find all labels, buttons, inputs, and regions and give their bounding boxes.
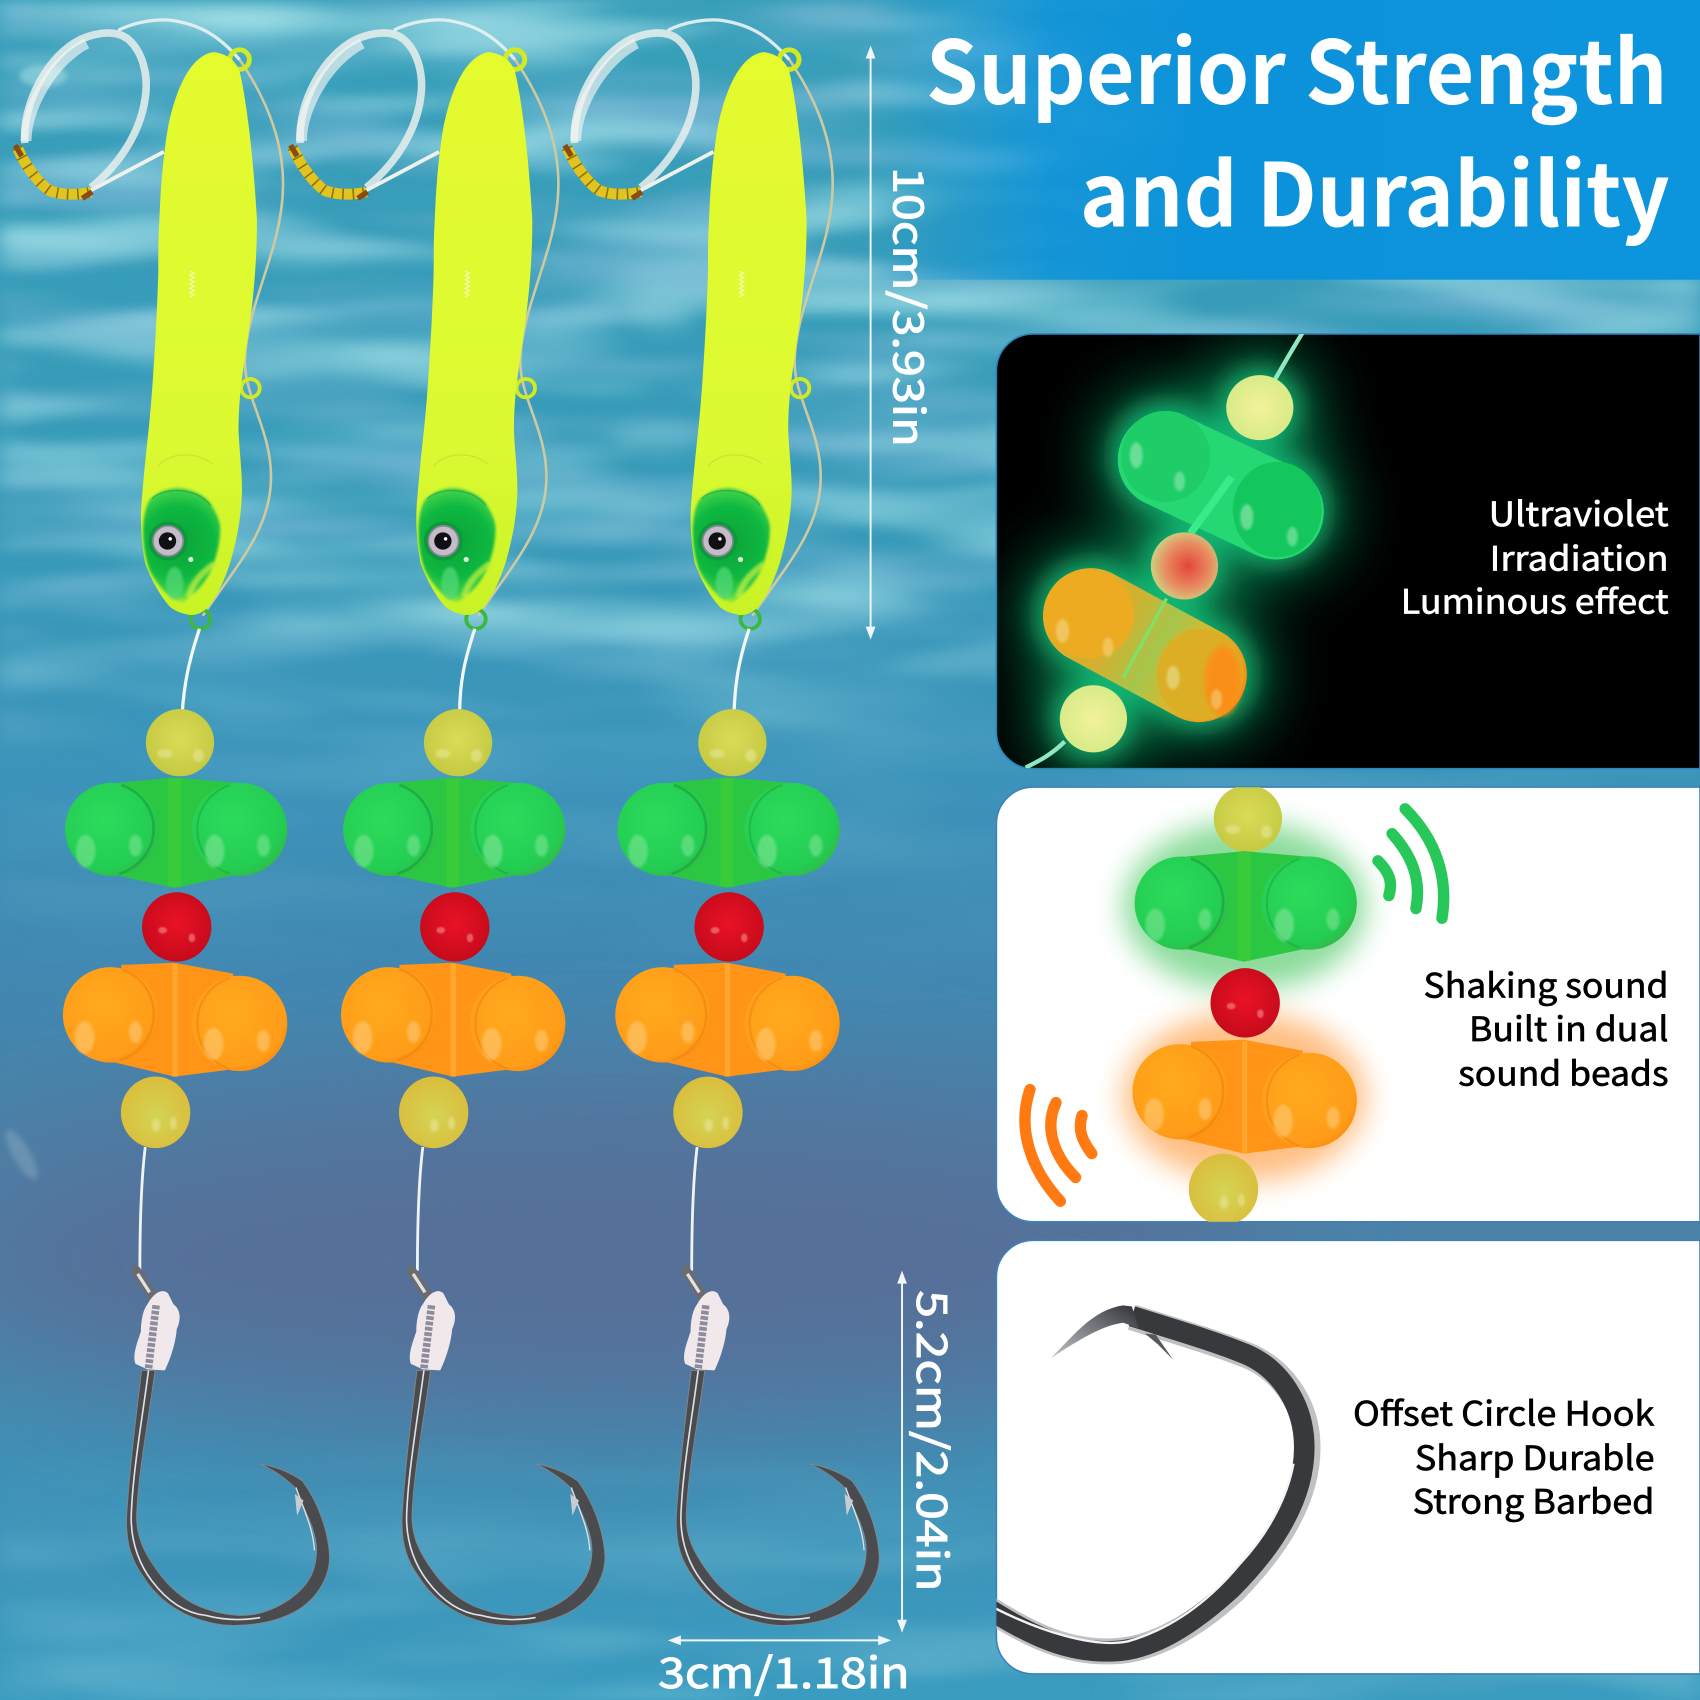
panel text: Luminous effect	[1401, 575, 1669, 624]
title banner	[867, 0, 1700, 280]
bead stack	[341, 709, 565, 1148]
rig 2	[291, 20, 605, 1625]
leader line to beads	[460, 629, 475, 713]
icon: orange sound waves	[1025, 1090, 1092, 1201]
panel text	[1424, 958, 1669, 1095]
circle hook	[127, 1271, 330, 1625]
panel text: Sharp Durable	[1415, 1431, 1654, 1480]
panel text: Built in dual	[1469, 1002, 1669, 1051]
lure with leader loop	[15, 20, 283, 629]
dimension: lure length: 10cm/3.93in	[880, 167, 941, 447]
dimension: hook length: 5.2cm/2.04in	[904, 1290, 965, 1592]
line to hook	[692, 1147, 697, 1271]
icon: green sound waves	[1378, 809, 1444, 918]
hook closeup	[989, 1305, 1308, 1651]
circle hook	[676, 1271, 879, 1625]
leader line to beads	[734, 629, 749, 713]
title text: and Durability	[1080, 126, 1670, 253]
line to hook	[140, 1147, 145, 1271]
sound bead illustration	[1123, 785, 1366, 1225]
bead stack	[63, 709, 287, 1148]
line to hook	[417, 1147, 423, 1271]
panel: circle hook	[989, 1240, 1700, 1674]
rig 1	[15, 20, 330, 1625]
panel text: Irradiation	[1490, 531, 1669, 580]
lure with leader loop	[565, 20, 833, 629]
lure with leader loop	[291, 20, 558, 629]
leader line to beads	[182, 629, 199, 713]
dimension: lure length	[866, 46, 941, 640]
title text: Superior Strength	[926, 3, 1667, 130]
circle hook	[402, 1271, 605, 1625]
dimension: hook length	[897, 1271, 965, 1633]
panel text: Shaking sound	[1424, 958, 1669, 1007]
panel: shaking sound	[996, 785, 1700, 1225]
glowing beads illustration	[1026, 332, 1322, 773]
panel: ultraviolet glow	[996, 332, 1700, 773]
panel text	[1401, 487, 1669, 624]
bead stack	[615, 709, 840, 1148]
title text	[926, 3, 1670, 253]
panel text	[1353, 1387, 1655, 1524]
panel text: Offset Circle Hook	[1353, 1387, 1655, 1436]
panel text: sound beads	[1458, 1046, 1669, 1095]
rig 3	[565, 20, 879, 1625]
dimension: hook width: 3cm/1.18in	[658, 1640, 910, 1700]
panel text: Ultraviolet	[1489, 487, 1669, 536]
panel text: Strong Barbed	[1413, 1475, 1654, 1524]
